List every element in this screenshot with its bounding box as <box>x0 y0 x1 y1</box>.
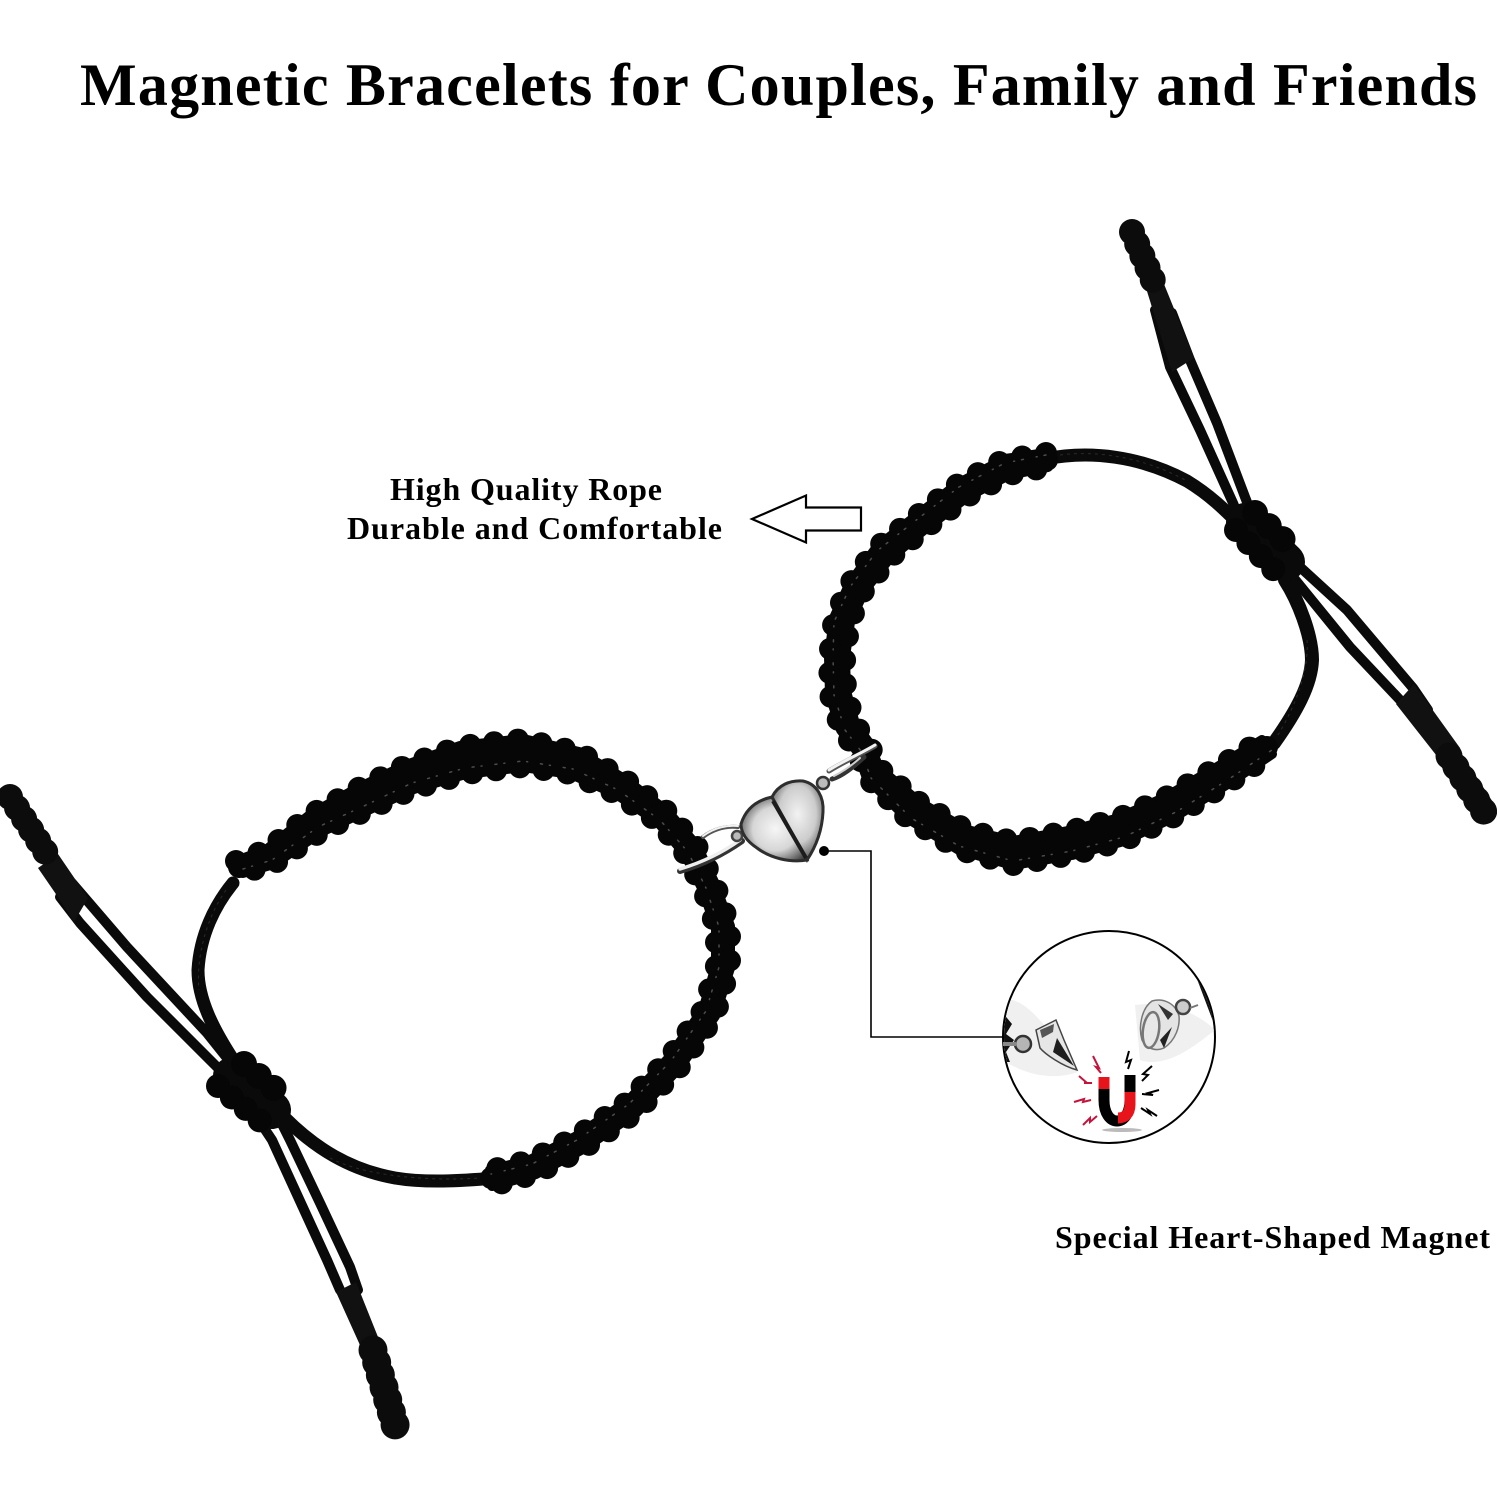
left bracelet braided band <box>236 739 730 1186</box>
magnet callout text: Special Heart-Shaped Magnet <box>1055 1219 1490 1255</box>
soft shadows <box>1003 1000 1078 1076</box>
right bracelet braided band <box>829 453 1272 865</box>
heart left half <box>741 797 807 861</box>
right bracelet upper tail <box>1132 232 1252 525</box>
left clasp ring <box>680 826 742 871</box>
heart divider <box>773 801 806 858</box>
icon: heart magnet clasp <box>680 745 875 871</box>
right magnet half <box>1140 1000 1198 1050</box>
left bracelet lower tail <box>262 1120 396 1428</box>
icon: red and black sparks <box>1074 1051 1159 1125</box>
arrow pointing to rope text <box>752 496 861 542</box>
left magnet half <box>1003 1020 1077 1070</box>
right bracelet sliding knot <box>1236 513 1295 572</box>
rope callout text: High Quality Rope <box>390 471 662 507</box>
left bracelet upper tail <box>10 797 235 1075</box>
cord ends in circle <box>1004 1016 1014 1062</box>
callout circle: magnet detail <box>1002 931 1215 1143</box>
right bracelet <box>829 232 1486 865</box>
clasp bails <box>732 777 829 841</box>
right clasp ring <box>829 745 875 779</box>
rope callout text <box>347 471 722 546</box>
left bracelet <box>10 739 730 1428</box>
heart right half <box>772 781 823 860</box>
left bracelet sliding knot <box>218 1064 286 1124</box>
left bracelet plain cord <box>198 883 495 1181</box>
rope callout text: Durable and Comfortable <box>347 510 722 546</box>
title: Magnetic Bracelets for Couples, Family and Friends <box>80 52 1477 118</box>
right bracelet lower tail <box>1293 567 1486 815</box>
callout leader line <box>819 846 1003 1037</box>
right bracelet plain cord <box>1045 454 1312 743</box>
icon: horseshoe magnet <box>1102 1075 1142 1132</box>
